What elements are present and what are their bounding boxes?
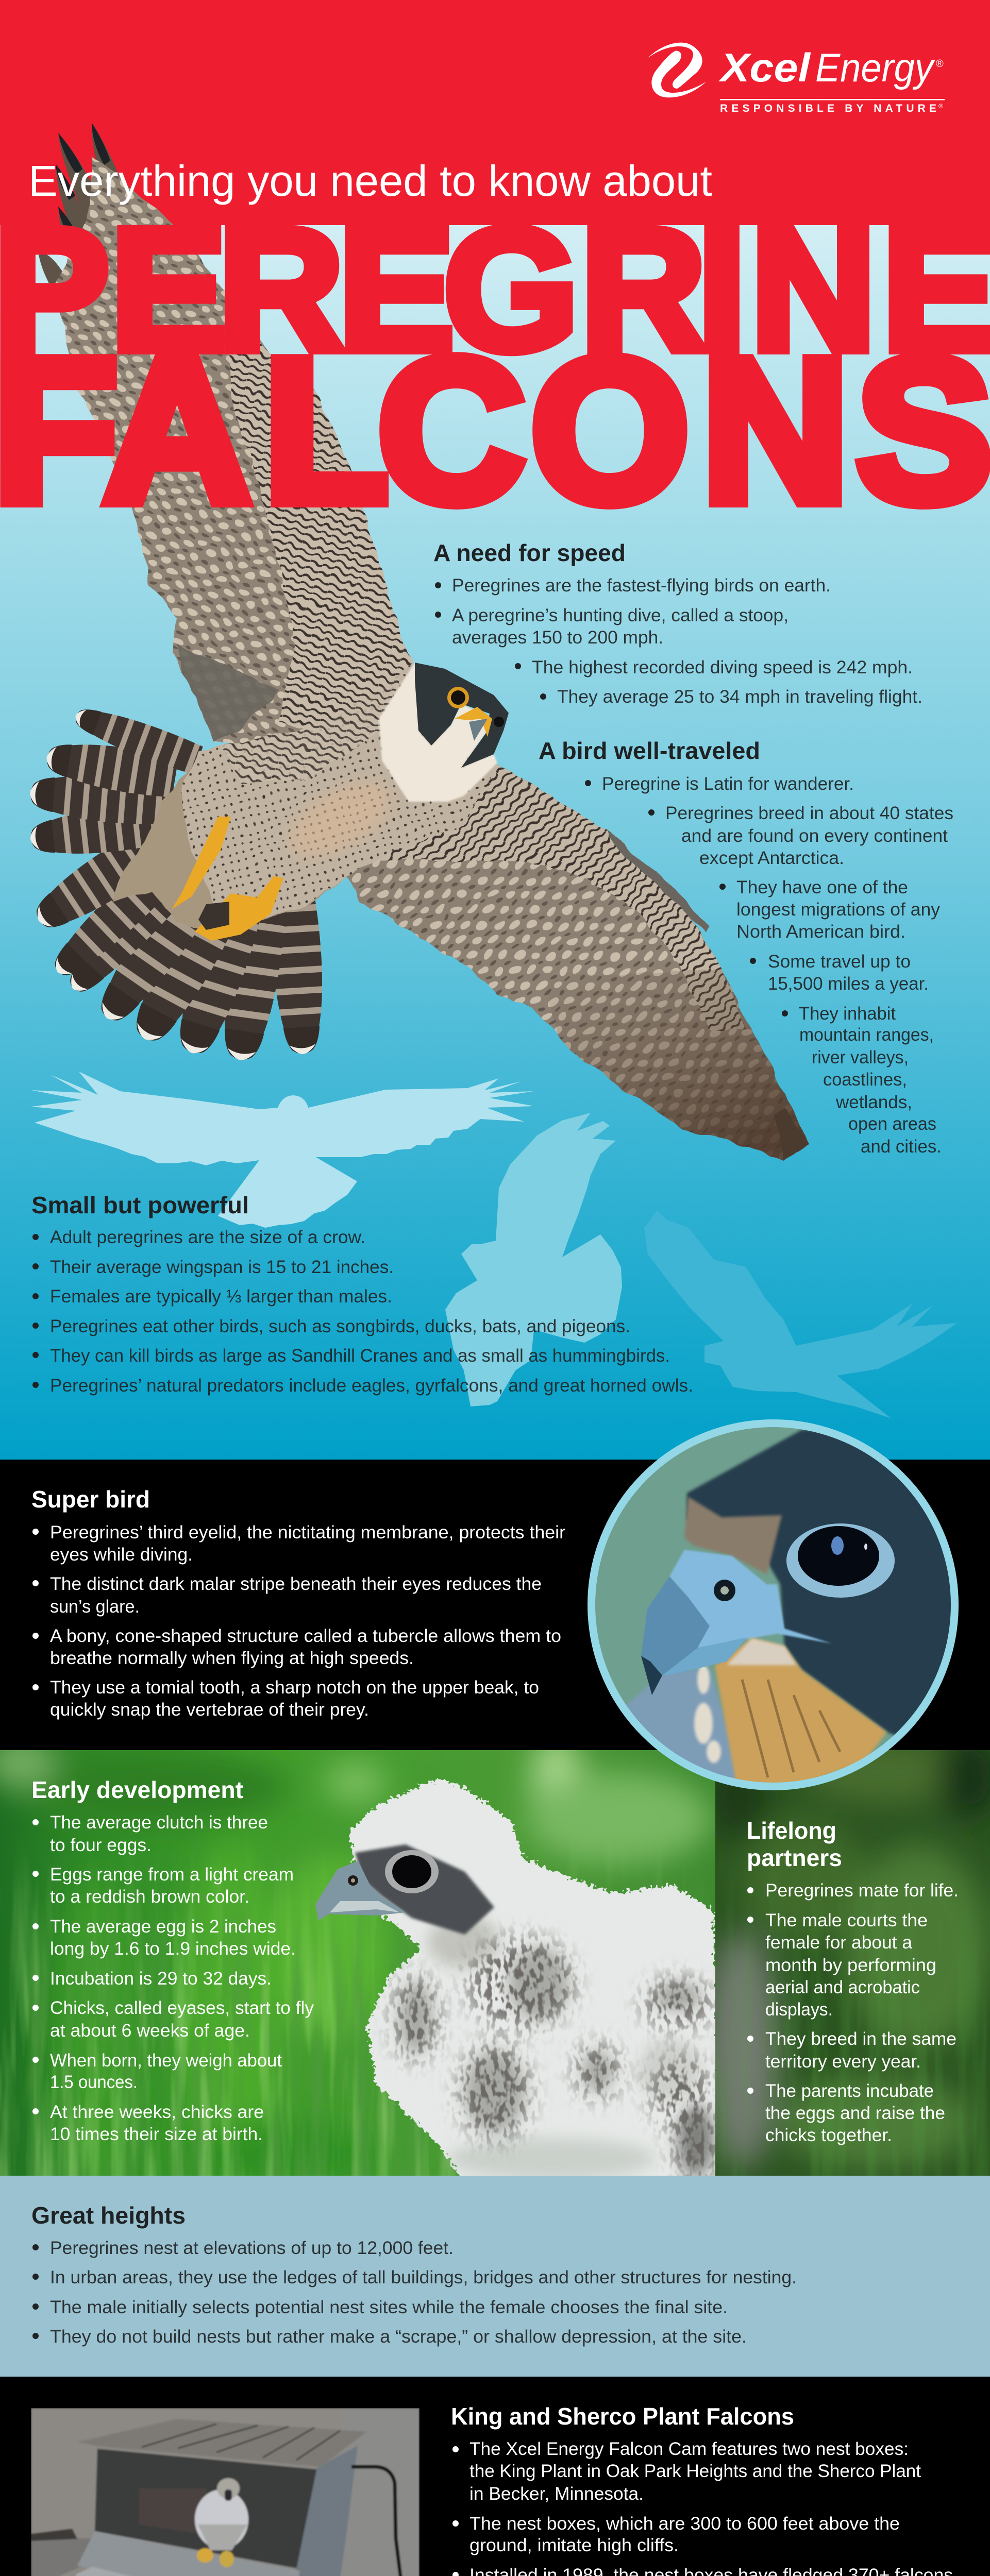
photo: nostril (714, 1580, 735, 1601)
falcon: dark head (415, 663, 509, 768)
nest: cable (351, 2467, 405, 2576)
Xcel Energy logo: ® (936, 58, 944, 70)
bullet list (585, 774, 953, 1157)
heading: Lifelong (747, 1817, 836, 1844)
bullet list: quickly snap the vertebrae of their prey. (50, 1700, 369, 1720)
bullet list (32, 2238, 797, 2347)
falcon: tail feathers (26, 700, 327, 1064)
Xcel Energy logo: RESPONSIBLE BY NATURE (720, 103, 936, 114)
heading: Early development (31, 1776, 243, 1803)
silhouette: climbing bird (445, 1113, 622, 1406)
falcon photo illustration (26, 123, 809, 1160)
heading: Small but powerful (31, 1192, 249, 1218)
bullet list: They inhabit (799, 1004, 896, 1024)
panel: Great heights (0, 2176, 990, 2377)
photo: golden neck (715, 1638, 887, 1793)
panel: Early development green photo (0, 1736, 721, 2190)
bullet list: The average clutch is three (50, 1812, 268, 1833)
bullet list: They breed in the same (765, 2029, 957, 2049)
photo: light blue face (669, 1550, 832, 1648)
bullet list: Peregrines eat other birds, such as songbirds, ducks, bats, and pigeons. (50, 1316, 630, 1336)
bullet list: Females are typically ⅓ larger than males. (50, 1286, 392, 1307)
bullet list: Eggs range from a light cream (50, 1865, 294, 1885)
bullet list: The Xcel Energy Falcon Cam features two nest boxes: (469, 2439, 909, 2459)
chick: dark face mask (355, 1844, 494, 1935)
panel: Lifelong partners dark overlay (706, 1736, 990, 2176)
falcon: beak and cere (455, 707, 504, 741)
bullet list: The distinct dark malar stripe beneath their eyes reduces the (50, 1574, 542, 1594)
bullet list: When born, they weigh about (50, 2050, 282, 2071)
bullet list: at about 6 weeks of age. (50, 2021, 250, 2041)
bullet list: displays. (765, 1999, 833, 2020)
bullet list: month by performing (765, 1955, 936, 1975)
bullet list: Peregrines nest at elevations of up to 12,000 feet. (50, 2238, 454, 2258)
bullet list: female for about a (765, 1933, 913, 1953)
bullet list: eyes while diving. (50, 1545, 193, 1565)
bullet list: long by 1.6 to 1.9 inches wide. (50, 1939, 296, 1959)
bullet list: They can kill birds as large as Sandhill Cranes and as small as hummingbirds. (50, 1346, 670, 1366)
heading: Super bird (31, 1486, 150, 1513)
bullet list (435, 575, 922, 707)
bullet list: Chicks, called eyases, start to fly (50, 1998, 314, 2018)
bullet list: open areas (848, 1114, 936, 1134)
falcon: upper wing (54, 155, 415, 762)
bullet list: The highest recorded diving speed is 242 mph. (532, 657, 913, 677)
grass blur blobs (0, 1736, 711, 2190)
bullet list: Peregrines mate for life. (765, 1880, 959, 1901)
falcon: body (180, 663, 497, 922)
bullet list: Peregrine is Latin for wanderer. (602, 774, 854, 794)
text block: A need for speed (433, 539, 922, 707)
photo: beak (641, 1577, 710, 1695)
logo: wordmark: Xcel (718, 45, 811, 90)
chick: eye (385, 1850, 439, 1893)
bullet list: river valleys, (812, 1047, 909, 1067)
bullet list: They average 25 to 34 mph in traveling flight. (557, 687, 922, 707)
bullet list: sun’s glare. (50, 1597, 140, 1617)
bullet list (452, 2439, 958, 2576)
bullet list: Peregrines’ natural predators include eagles, gyrfalcons, and great horned owls. (50, 1376, 693, 1396)
photo: speckled breast (694, 1665, 721, 1763)
bullet list: averages 150 to 200 mph. (452, 628, 663, 648)
bullet list: Peregrines’ third eyelid, the nictitating membrane, protects their (50, 1522, 565, 1543)
background: sky gradient (0, 225, 990, 1460)
bullet list: They do not build nests but rather make a “scrape,” or shallow depression, at the site. (50, 2327, 747, 2347)
chick: grey mottling (399, 1917, 714, 2179)
panel: King and Sherco black band (0, 2377, 990, 2576)
bullet list: the eggs and raise the (765, 2103, 945, 2123)
nest: ground left (31, 2538, 92, 2576)
bullet list: A peregrine’s hunting dive, called a stoop, (452, 605, 788, 625)
bullet list: coastlines, (823, 1070, 907, 1090)
bullet list: North American bird. (736, 922, 905, 942)
nest: box side panel (292, 2446, 358, 2576)
nest: box interior (95, 2449, 317, 2569)
nest: roof (77, 2419, 367, 2467)
grass texture (0, 1750, 371, 2176)
heading: A bird well-traveled (539, 737, 760, 764)
falcon: feathered wings and body (roughened) (54, 155, 809, 1160)
text block: A bird well-traveled (539, 737, 953, 1157)
falcon: barred shoulder (222, 670, 402, 783)
bullet list: A bony, cone-shaped structure called a tubercle allows them to (50, 1626, 561, 1646)
heading: A need for speed (433, 539, 626, 566)
photo: ring (592, 1423, 954, 1787)
bullet list: The male courts the (765, 1910, 928, 1930)
photo: brown brow streaks (684, 1497, 782, 1574)
text block: King and Sherco Plant Falcons (451, 2403, 958, 2576)
background: red header (0, 0, 990, 227)
title word: FALCONS: FALCONS (0, 316, 990, 544)
bullet list: The male initially selects potential nest sites while the female chooses the final site. (50, 2297, 728, 2317)
heading (747, 1817, 842, 1871)
heading: King and Sherco Plant Falcons (451, 2403, 794, 2430)
bullet list: to four eggs. (50, 1835, 152, 1855)
bullet list: Their average wingspan is 15 to 21 inches. (50, 1257, 394, 1277)
bullet list: The nest boxes, which are 300 to 600 feet above the (469, 2514, 900, 2534)
silhouette: diving bird (644, 1211, 957, 1418)
bullet list: chicks together. (765, 2125, 892, 2145)
bullet list: to a reddish brown color. (50, 1887, 249, 1907)
chick (309, 1779, 721, 2184)
bullet list: aerial and acrobatic (765, 1977, 920, 1997)
bullet list: At three weeks, chicks are (50, 2102, 264, 2122)
heading: Great heights (31, 2202, 186, 2229)
photo: grey-blue chest (624, 1668, 747, 1793)
text block: Super bird (31, 1486, 565, 1720)
falcon: eye (447, 687, 469, 708)
title lead-in: Everything you need to know about (28, 157, 712, 205)
Xcel Energy logo (648, 43, 945, 114)
bullet list: 15,500 miles a year. (768, 974, 929, 994)
title word: PEREGRINE: PEREGRINE (0, 193, 990, 386)
bullet list: breathe normally when flying at high speeds. (50, 1648, 414, 1668)
text block: Small but powerful (31, 1192, 693, 1396)
falcon: peach belly (277, 766, 404, 872)
bullet list: Some travel up to (768, 952, 911, 972)
photo: nest box with falcon (31, 2408, 420, 2576)
bullet list (32, 1227, 693, 1396)
bullet list: in Becker, Minnesota. (469, 2484, 644, 2504)
circular photo: falcon head close-up (592, 1423, 964, 1793)
bullet list: territory every year. (765, 2052, 921, 2072)
bullet list: Incubation is 29 to 32 days. (50, 1969, 272, 1989)
bullet list: They use a tomial tooth, a sharp notch on the upper beak, to (50, 1677, 539, 1698)
photo: cream throat (727, 1638, 796, 1665)
Xcel Energy logo: ® (938, 103, 943, 110)
photo: neck streaks (742, 1680, 840, 1777)
Xcel Energy logo: Energy (815, 45, 935, 90)
bullet list: In urban areas, they use the ledges of tall buildings, bridges and other structures for nesting. (50, 2267, 797, 2287)
photo: dark head (687, 1430, 964, 1762)
bullet list: Adult peregrines are the size of a crow. (50, 1227, 365, 1247)
bullet list: The average egg is 2 inches (50, 1917, 276, 1937)
text block: Lifelong partners (747, 1817, 959, 2145)
bullet list: and cities. (861, 1137, 942, 1157)
bullet list: mountain ranges, (799, 1025, 934, 1045)
bullet list: and are found on every continent (681, 826, 948, 846)
bullet list: except Antarctica. (699, 848, 844, 868)
nest: ledges (77, 2531, 300, 2576)
photo: eye (786, 1523, 895, 1598)
bullet list: wetlands, (835, 1092, 912, 1112)
bullet list: longest migrations of any (736, 900, 940, 920)
bullet list (747, 1880, 959, 2145)
bullet list: Peregrines are the fastest-flying birds on earth. (452, 575, 831, 596)
text block: Early development (31, 1776, 314, 2144)
silhouette: soaring bird (31, 1072, 534, 1228)
logo: swoosh mark (648, 43, 706, 97)
falcon: cream chest (379, 663, 497, 802)
text block: Great heights (31, 2202, 797, 2347)
chick: beak (315, 1861, 406, 1921)
bullet list: 10 times their size at birth. (50, 2124, 263, 2144)
bullet list (32, 1812, 314, 2144)
nest: falcon (195, 2478, 248, 2567)
bullet list: Peregrines breed in about 40 states (665, 803, 953, 823)
bullet list: 1.5 ounces. (50, 2072, 138, 2092)
falcon: primaries, dark wing tips (38, 123, 135, 314)
bullet list (32, 1522, 565, 1720)
heading: partners (747, 1844, 842, 1871)
chick: dark feather flecks (378, 1922, 715, 2176)
bullet list: the King Plant in Oak Park Heights and the Sherco Plant (469, 2461, 921, 2481)
falcon: under-tail coverts (111, 760, 346, 933)
falcon: lower right wing (309, 765, 809, 1160)
bullet list: The parents incubate (765, 2081, 934, 2101)
bullet list: ground, imitate high cliffs. (469, 2535, 679, 2555)
falcon: yellow legs and feet (172, 817, 283, 941)
panel: Super bird black band (0, 1460, 990, 1750)
bullet list: They have one of the (736, 877, 908, 897)
